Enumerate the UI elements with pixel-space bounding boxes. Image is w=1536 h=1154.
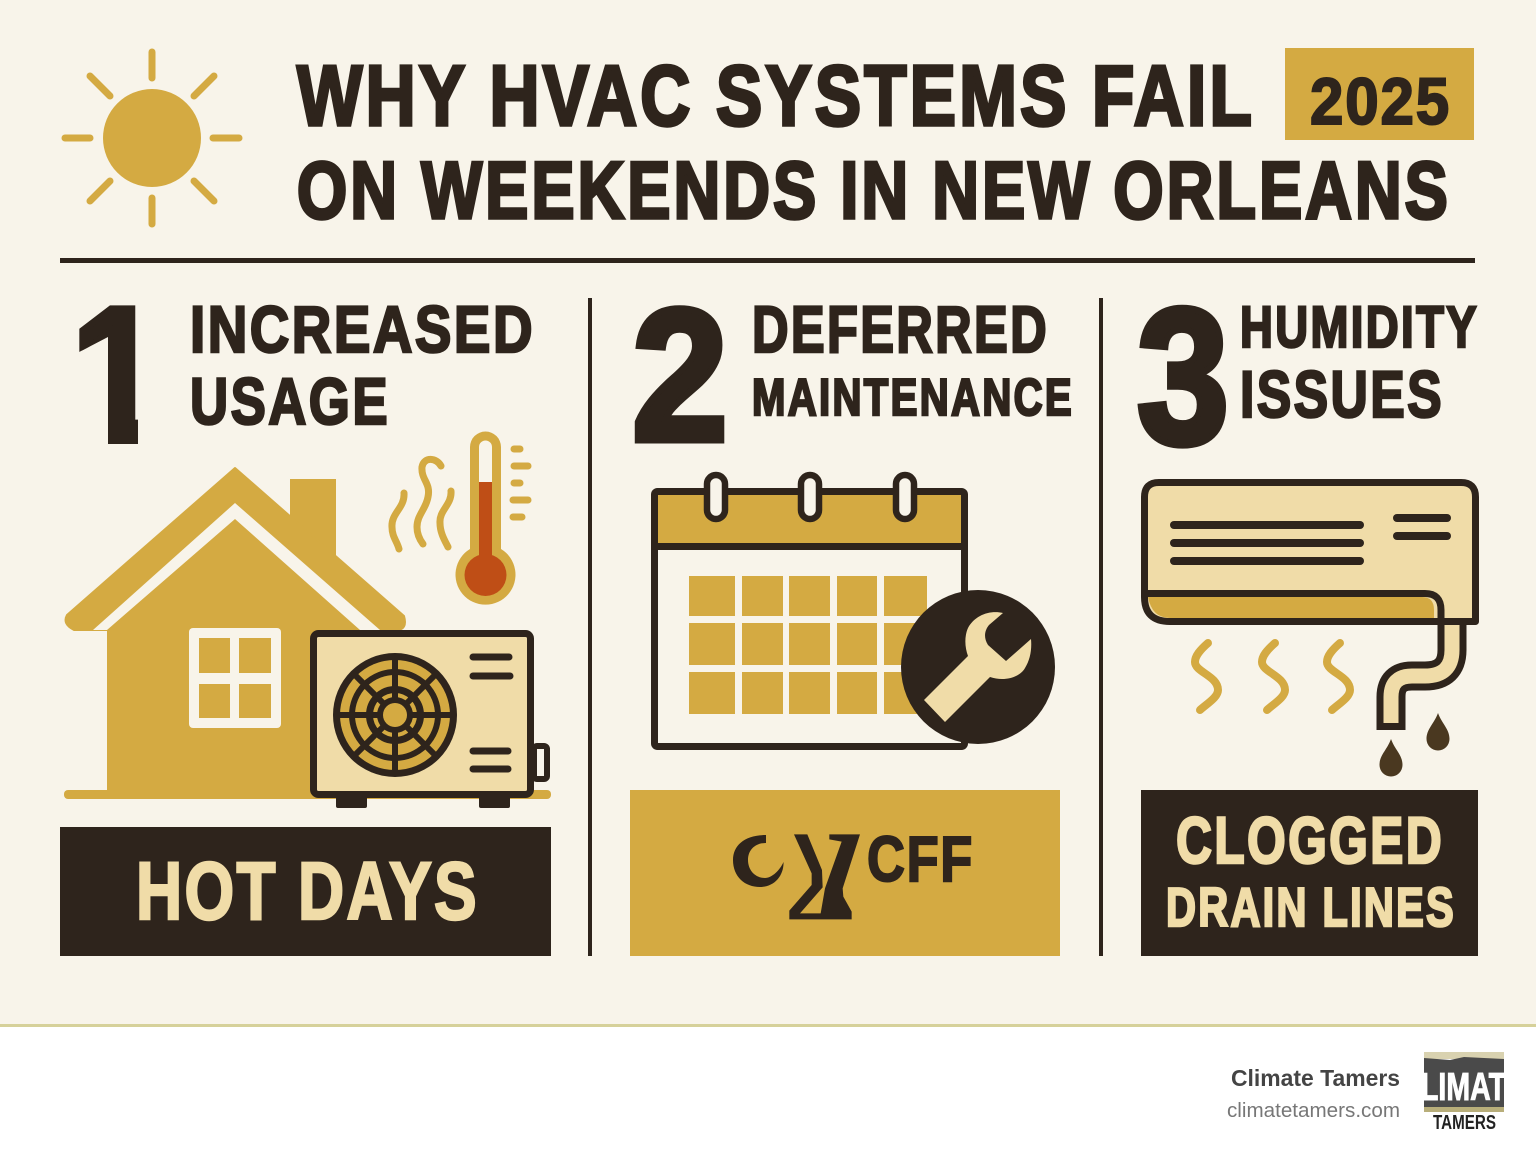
footer brand text: Climate Tamers	[1231, 1065, 1400, 1091]
label: garbled logo	[630, 790, 1060, 956]
label: hot days	[60, 827, 551, 956]
panel: increased usage	[60, 267, 551, 956]
footer logo: TAMERS	[1433, 1112, 1496, 1134]
heading: deferred maintenance: MAINTENANCE	[752, 369, 1074, 427]
heading: increased usage: INCREASED	[190, 292, 535, 366]
label: clogged drain lines: CLOGGED	[1176, 803, 1444, 877]
year badge: 2025	[1310, 64, 1451, 138]
footer brand text: climatetamers.com	[1227, 1100, 1400, 1122]
number 2: 2	[632, 270, 728, 480]
footer logo: LIMAT	[1421, 1066, 1506, 1109]
heading: increased usage: USAGE	[190, 364, 390, 438]
panel: deferred maintenance	[630, 270, 1074, 956]
icon: outdoor AC unit	[314, 634, 547, 808]
icon: calendar	[654, 475, 965, 746]
icon: drain pipe	[1391, 624, 1452, 730]
heading: humidity issues: HUMIDITY	[1240, 295, 1479, 360]
label: garbled logo: CFF	[867, 823, 974, 895]
number 3: 3	[1137, 268, 1229, 484]
icon: sun	[65, 52, 239, 224]
window	[189, 628, 281, 728]
heading: increased usage	[190, 292, 535, 438]
icon: wall AC unit	[1144, 482, 1476, 625]
icon: wrench badge	[901, 590, 1055, 744]
heading: deferred maintenance: DEFERRED	[752, 292, 1049, 366]
icon: heat waves	[392, 459, 451, 549]
icon: water drops	[1380, 713, 1450, 777]
number 1: 1	[71, 267, 163, 485]
panel: humidity issues	[1137, 268, 1479, 956]
title: WHY HVAC SYSTEMS FAIL	[297, 49, 1255, 144]
footer logo	[1421, 1052, 1506, 1134]
year badge	[1285, 48, 1474, 140]
heading: deferred maintenance	[752, 292, 1074, 427]
label: clogged drain lines	[1141, 790, 1478, 956]
icon: thermometer	[456, 432, 528, 605]
title	[297, 49, 1451, 236]
icon: vapor waves	[1195, 643, 1350, 710]
heading: humidity issues	[1240, 295, 1479, 431]
label: hot days: HOT DAYS	[136, 846, 479, 937]
heading: humidity issues: ISSUES	[1240, 357, 1444, 431]
icon: house	[64, 468, 551, 799]
fan	[333, 653, 457, 777]
footer brand text	[1227, 1065, 1400, 1122]
